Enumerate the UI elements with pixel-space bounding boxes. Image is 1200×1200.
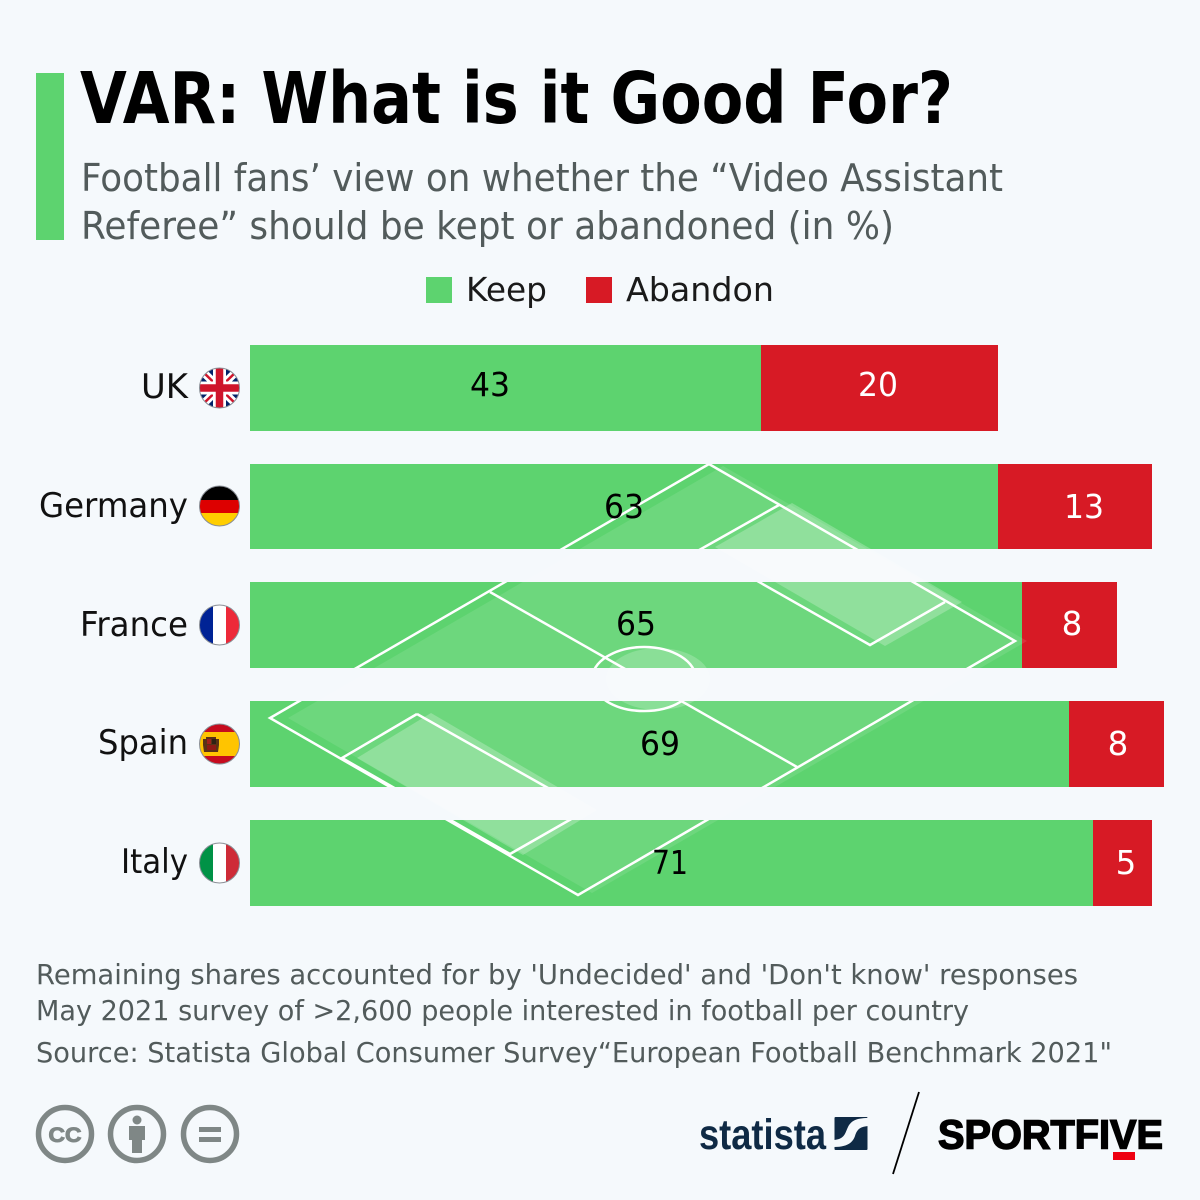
value labels: 5	[1116, 844, 1136, 882]
logo: SPORTFIVE: SPORTFIVE	[938, 1112, 1163, 1158]
value labels: 63	[604, 488, 644, 526]
row: Germany bars	[250, 464, 1152, 549]
row: Italy bars	[250, 820, 1152, 906]
icon: Spain flag	[199, 724, 240, 764]
icon: attribution person	[110, 1108, 164, 1160]
subtitle: Football fans’ view on whether the “Video Assistant	[81, 156, 1003, 201]
country labels: France	[80, 605, 188, 644]
icon: UK flag	[199, 368, 240, 408]
country labels: Germany	[39, 486, 188, 525]
icon: CC: CC	[48, 1124, 82, 1147]
icon: Italy flag	[199, 843, 240, 883]
footnotes: May 2021 survey of >2,600 people interested in football per country	[36, 994, 969, 1027]
footnotes	[36, 958, 1112, 1069]
country labels	[39, 367, 189, 881]
bar chart	[250, 345, 1164, 906]
value labels: 20	[858, 366, 898, 404]
value labels: 69	[640, 725, 680, 763]
country labels: Italy	[121, 842, 188, 881]
value labels: 43	[470, 366, 510, 404]
row: Spain bars	[250, 701, 1164, 787]
icon: France flag	[199, 605, 240, 645]
icon: Germany flag	[199, 486, 240, 527]
legend: keep: Keep	[466, 270, 547, 309]
football pitch overlay	[270, 464, 1027, 895]
legend: abandon: Abandon	[626, 270, 774, 309]
row: UK bars	[250, 345, 998, 431]
country labels: Spain	[98, 723, 188, 762]
value labels	[470, 366, 1136, 882]
value labels: 8	[1062, 605, 1082, 643]
title accent bar	[36, 73, 64, 240]
divider slash	[893, 1092, 919, 1174]
value labels: 71	[652, 844, 688, 882]
country labels: UK	[141, 367, 189, 406]
legend: keep	[426, 270, 547, 309]
value labels: 8	[1108, 725, 1128, 763]
title: VAR: What is it Good For?	[80, 57, 953, 140]
legend	[426, 270, 774, 309]
footnotes: Source: Statista Global Consumer Survey“European Football Benchmark 2021"	[36, 1036, 1112, 1069]
subtitle	[81, 156, 1003, 249]
subtitle: Referee” should be kept or abandoned (in %)	[81, 204, 894, 249]
value labels: 65	[616, 605, 656, 643]
footnotes: Remaining shares accounted for by 'Undecided' and 'Don't know' responses	[36, 958, 1078, 991]
icon: no derivatives	[184, 1108, 236, 1160]
row: France bars	[250, 582, 1117, 668]
value labels: 13	[1064, 488, 1104, 526]
logo: statista: statista	[699, 1111, 827, 1159]
icon: CC	[38, 1108, 92, 1160]
